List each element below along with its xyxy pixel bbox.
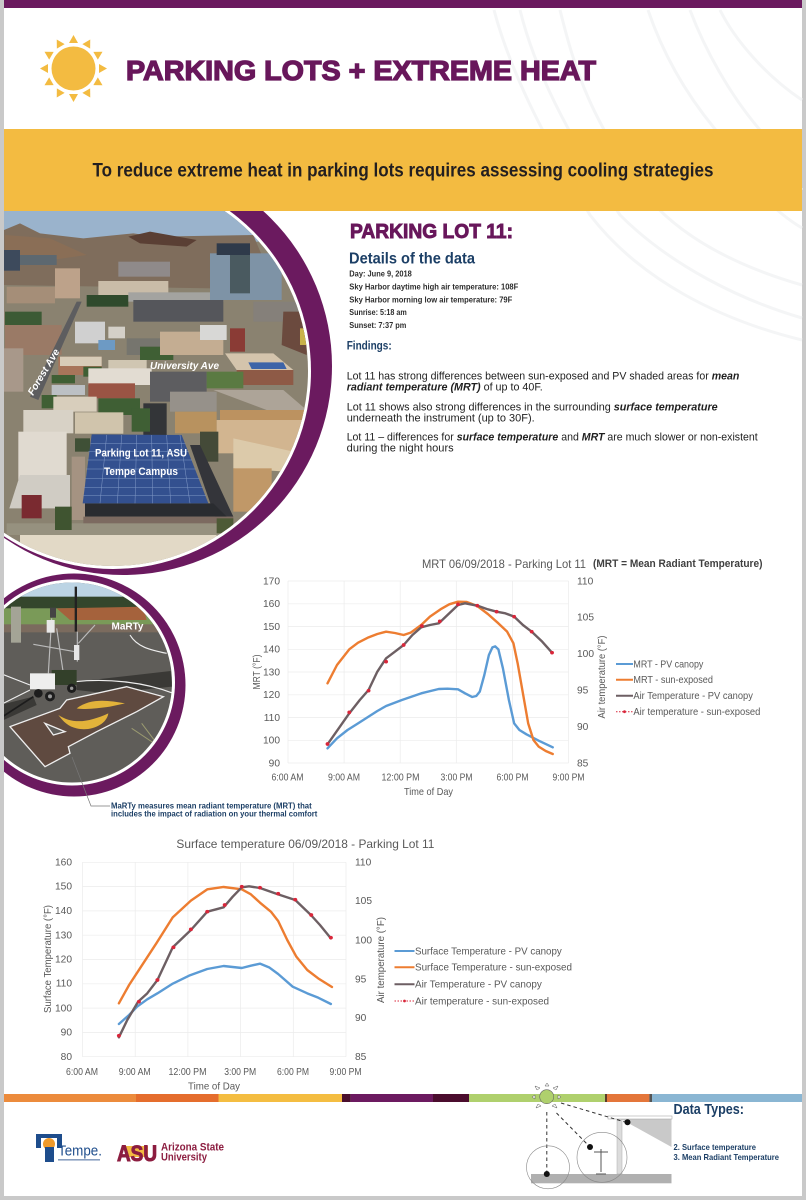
x axis labels: 3:00 PM <box>440 772 472 784</box>
data series <box>117 885 333 1037</box>
left axis labels <box>263 576 280 769</box>
text block: data details: Sky Harbor daytime high air temperature: 108F <box>349 281 518 291</box>
chart: surface temperature line chart <box>43 837 572 1092</box>
panel: aerial photo of Parking Lot 11 <box>4 211 332 575</box>
right axis labels <box>577 576 594 769</box>
right axis labels: 110 <box>355 858 372 869</box>
top purple bar <box>4 0 802 8</box>
heading: data types: Data Types: <box>674 1101 744 1118</box>
right axis labels: 100 <box>355 935 372 946</box>
callout: MaRTy description: MaRTy measures mean radiant temperature (MRT) that <box>111 800 312 810</box>
left axis labels <box>55 858 72 1063</box>
left axis labels: 110 <box>264 713 280 724</box>
right axis labels: 105 <box>355 896 372 907</box>
text block: data details: Sunset: 7:37 pm <box>349 320 407 330</box>
right axis labels: 90 <box>577 722 589 733</box>
logo: Tempe: Tempe. <box>58 1143 102 1160</box>
legend: Air Temperature - PV canopy <box>415 980 543 991</box>
text block: finding on MRT: Lot 11 has strong differences between sun-exposed and PV shaded areas for mean <box>347 371 740 383</box>
left axis labels: 100 <box>263 736 280 747</box>
right axis labels: 110 <box>577 576 594 587</box>
left axis labels: 140 <box>55 906 72 917</box>
left axis labels: 110 <box>56 979 72 990</box>
legend: MRT - sun-exposed <box>633 675 713 686</box>
right axis labels: 95 <box>355 974 367 985</box>
text block: finding on night hours: during the night hours <box>347 443 454 455</box>
right axis labels: 85 <box>355 1052 367 1063</box>
axis titles <box>252 636 608 798</box>
axis titles: Air temperature (°F) <box>376 917 387 1003</box>
axis titles: Surface Temperature (°F) <box>43 905 54 1013</box>
text block: finding on night hours <box>347 431 758 455</box>
icon: sun <box>40 35 107 102</box>
x axis labels: 12:00 PM <box>168 1067 206 1078</box>
text block: data types list: 2. Surface temperature <box>674 1142 756 1152</box>
left axis labels: 100 <box>55 1003 72 1014</box>
axis titles: Time of Day <box>404 787 454 798</box>
photo label: MaRTy: MaRTy <box>112 620 144 632</box>
text block: data details <box>349 269 518 330</box>
banner heading: To reduce extreme heat in parking lots requires assessing cooling strategies <box>92 161 714 182</box>
right axis labels: 100 <box>577 649 594 660</box>
right axis labels: 105 <box>577 612 594 623</box>
data series <box>326 602 554 754</box>
callout: MaRTy description <box>72 757 317 819</box>
chart title: MRT 06/09/2018 - Parking Lot 11 <box>422 557 586 571</box>
heading: Parking Lot 11: PARKING LOT 11: <box>350 221 513 243</box>
right axis labels: 85 <box>577 758 589 769</box>
heading: findings: Findings: <box>347 340 392 352</box>
diagram: data types measurement <box>526 1083 672 1189</box>
text block: finding on night hours: Lot 11 – differences for surface temperature and MRT are much slower or non-existent <box>347 431 758 443</box>
x axis labels: 6:00 PM <box>496 772 528 784</box>
right axis labels <box>355 858 372 1063</box>
logo: Arizona State University <box>117 1141 224 1166</box>
left axis labels: 130 <box>263 667 280 678</box>
logo: Arizona State University: Arizona State <box>161 1142 224 1154</box>
left axis labels: 130 <box>55 930 72 941</box>
MRT definition note: (MRT = Mean Radiant Temperature) <box>593 558 763 570</box>
left axis labels: 160 <box>55 858 72 869</box>
x axis labels: 3:00 PM <box>224 1067 256 1078</box>
legend: Surface Temperature - sun-exposed <box>415 963 572 974</box>
text block: data details: Day: June 9, 2018 <box>349 269 412 279</box>
photo label: Parking Lot 11: Tempe Campus <box>104 466 178 478</box>
text block: data details: Sky Harbor morning low air temperature: 79F <box>349 294 512 304</box>
title: PARKING LOTS + EXTREME HEAT <box>126 55 596 86</box>
photo label: University Ave: University Ave <box>150 361 219 372</box>
photo label: Forest Ave: Forest Ave <box>26 347 63 398</box>
legend: Air temperature - sun-exposed <box>415 996 549 1007</box>
x axis labels: 9:00 AM <box>119 1067 151 1078</box>
legend: Air Temperature - PV canopy <box>633 691 754 702</box>
left axis labels: 120 <box>263 690 280 701</box>
panel: MaRTy photo <box>0 574 186 796</box>
x axis labels: 9:00 AM <box>328 772 360 784</box>
left axis labels: 150 <box>55 882 72 893</box>
x axis labels: 6:00 AM <box>66 1067 98 1078</box>
left axis labels: 150 <box>263 622 280 633</box>
text block: data details: Sunrise: 5:18 am <box>349 307 407 317</box>
photo label: Parking Lot 11: Parking Lot 11, ASU <box>95 448 187 460</box>
callout: MaRTy description: includes the impact of radiation on your thermal comfort <box>111 809 317 819</box>
text block: data types list: 3. Mean Radiant Temperature <box>674 1152 779 1162</box>
legend <box>394 946 572 1007</box>
right axis labels: 90 <box>355 1013 367 1024</box>
legend: MRT - PV canopy <box>633 659 704 670</box>
x axis labels: 9:00 PM <box>330 1067 362 1078</box>
left axis labels: 90 <box>61 1028 72 1039</box>
logo: Tempe <box>36 1134 102 1162</box>
logo: Arizona State University: ASU <box>117 1141 157 1166</box>
yellow banner <box>4 129 802 211</box>
chart title: Surface temperature 06/09/2018 - Parking Lot 11 <box>176 837 435 851</box>
axis titles: MRT (°F) <box>252 654 263 690</box>
left axis labels: 160 <box>263 599 280 610</box>
x axis labels: 6:00 AM <box>272 772 304 784</box>
text block: data types list <box>674 1142 779 1162</box>
left axis labels: 90 <box>269 758 280 769</box>
left axis labels: 170 <box>263 576 280 587</box>
right axis labels: 95 <box>577 686 589 697</box>
text block: finding on surface temperature <box>347 401 718 424</box>
text block: finding on MRT: radiant temperature (MRT) of up to 40F. <box>347 382 543 394</box>
x axis labels: 6:00 PM <box>277 1067 309 1078</box>
x axis labels <box>66 1067 362 1078</box>
left axis labels: 80 <box>61 1052 72 1063</box>
legend <box>616 659 761 718</box>
photo label: Parking Lot 11 <box>95 448 187 478</box>
axis titles: Time of Day <box>188 1081 241 1092</box>
text block: finding on surface temperature: underneath the instrument (up to 30F). <box>347 412 535 424</box>
logo: Arizona State University: University <box>161 1151 208 1163</box>
colored footer stripe <box>4 1094 802 1102</box>
text block: finding on MRT <box>347 371 740 394</box>
heading: details of the data: Details of the data <box>349 251 475 268</box>
x axis labels: 12:00 PM <box>382 772 420 784</box>
left axis labels: 140 <box>263 645 280 656</box>
axis titles <box>43 905 387 1092</box>
legend: Air temperature - sun-exposed <box>633 707 761 718</box>
x axis labels: 9:00 PM <box>552 772 584 784</box>
chart: MRT line chart <box>252 557 763 798</box>
axis titles: Air temperature (°F) <box>597 636 608 718</box>
left axis labels: 120 <box>55 955 72 966</box>
text block: finding on surface temperature: Lot 11 shows also strong differences in the surrounding surface temperature <box>347 401 718 413</box>
x axis labels <box>272 772 584 784</box>
legend: Surface Temperature - PV canopy <box>415 946 563 957</box>
